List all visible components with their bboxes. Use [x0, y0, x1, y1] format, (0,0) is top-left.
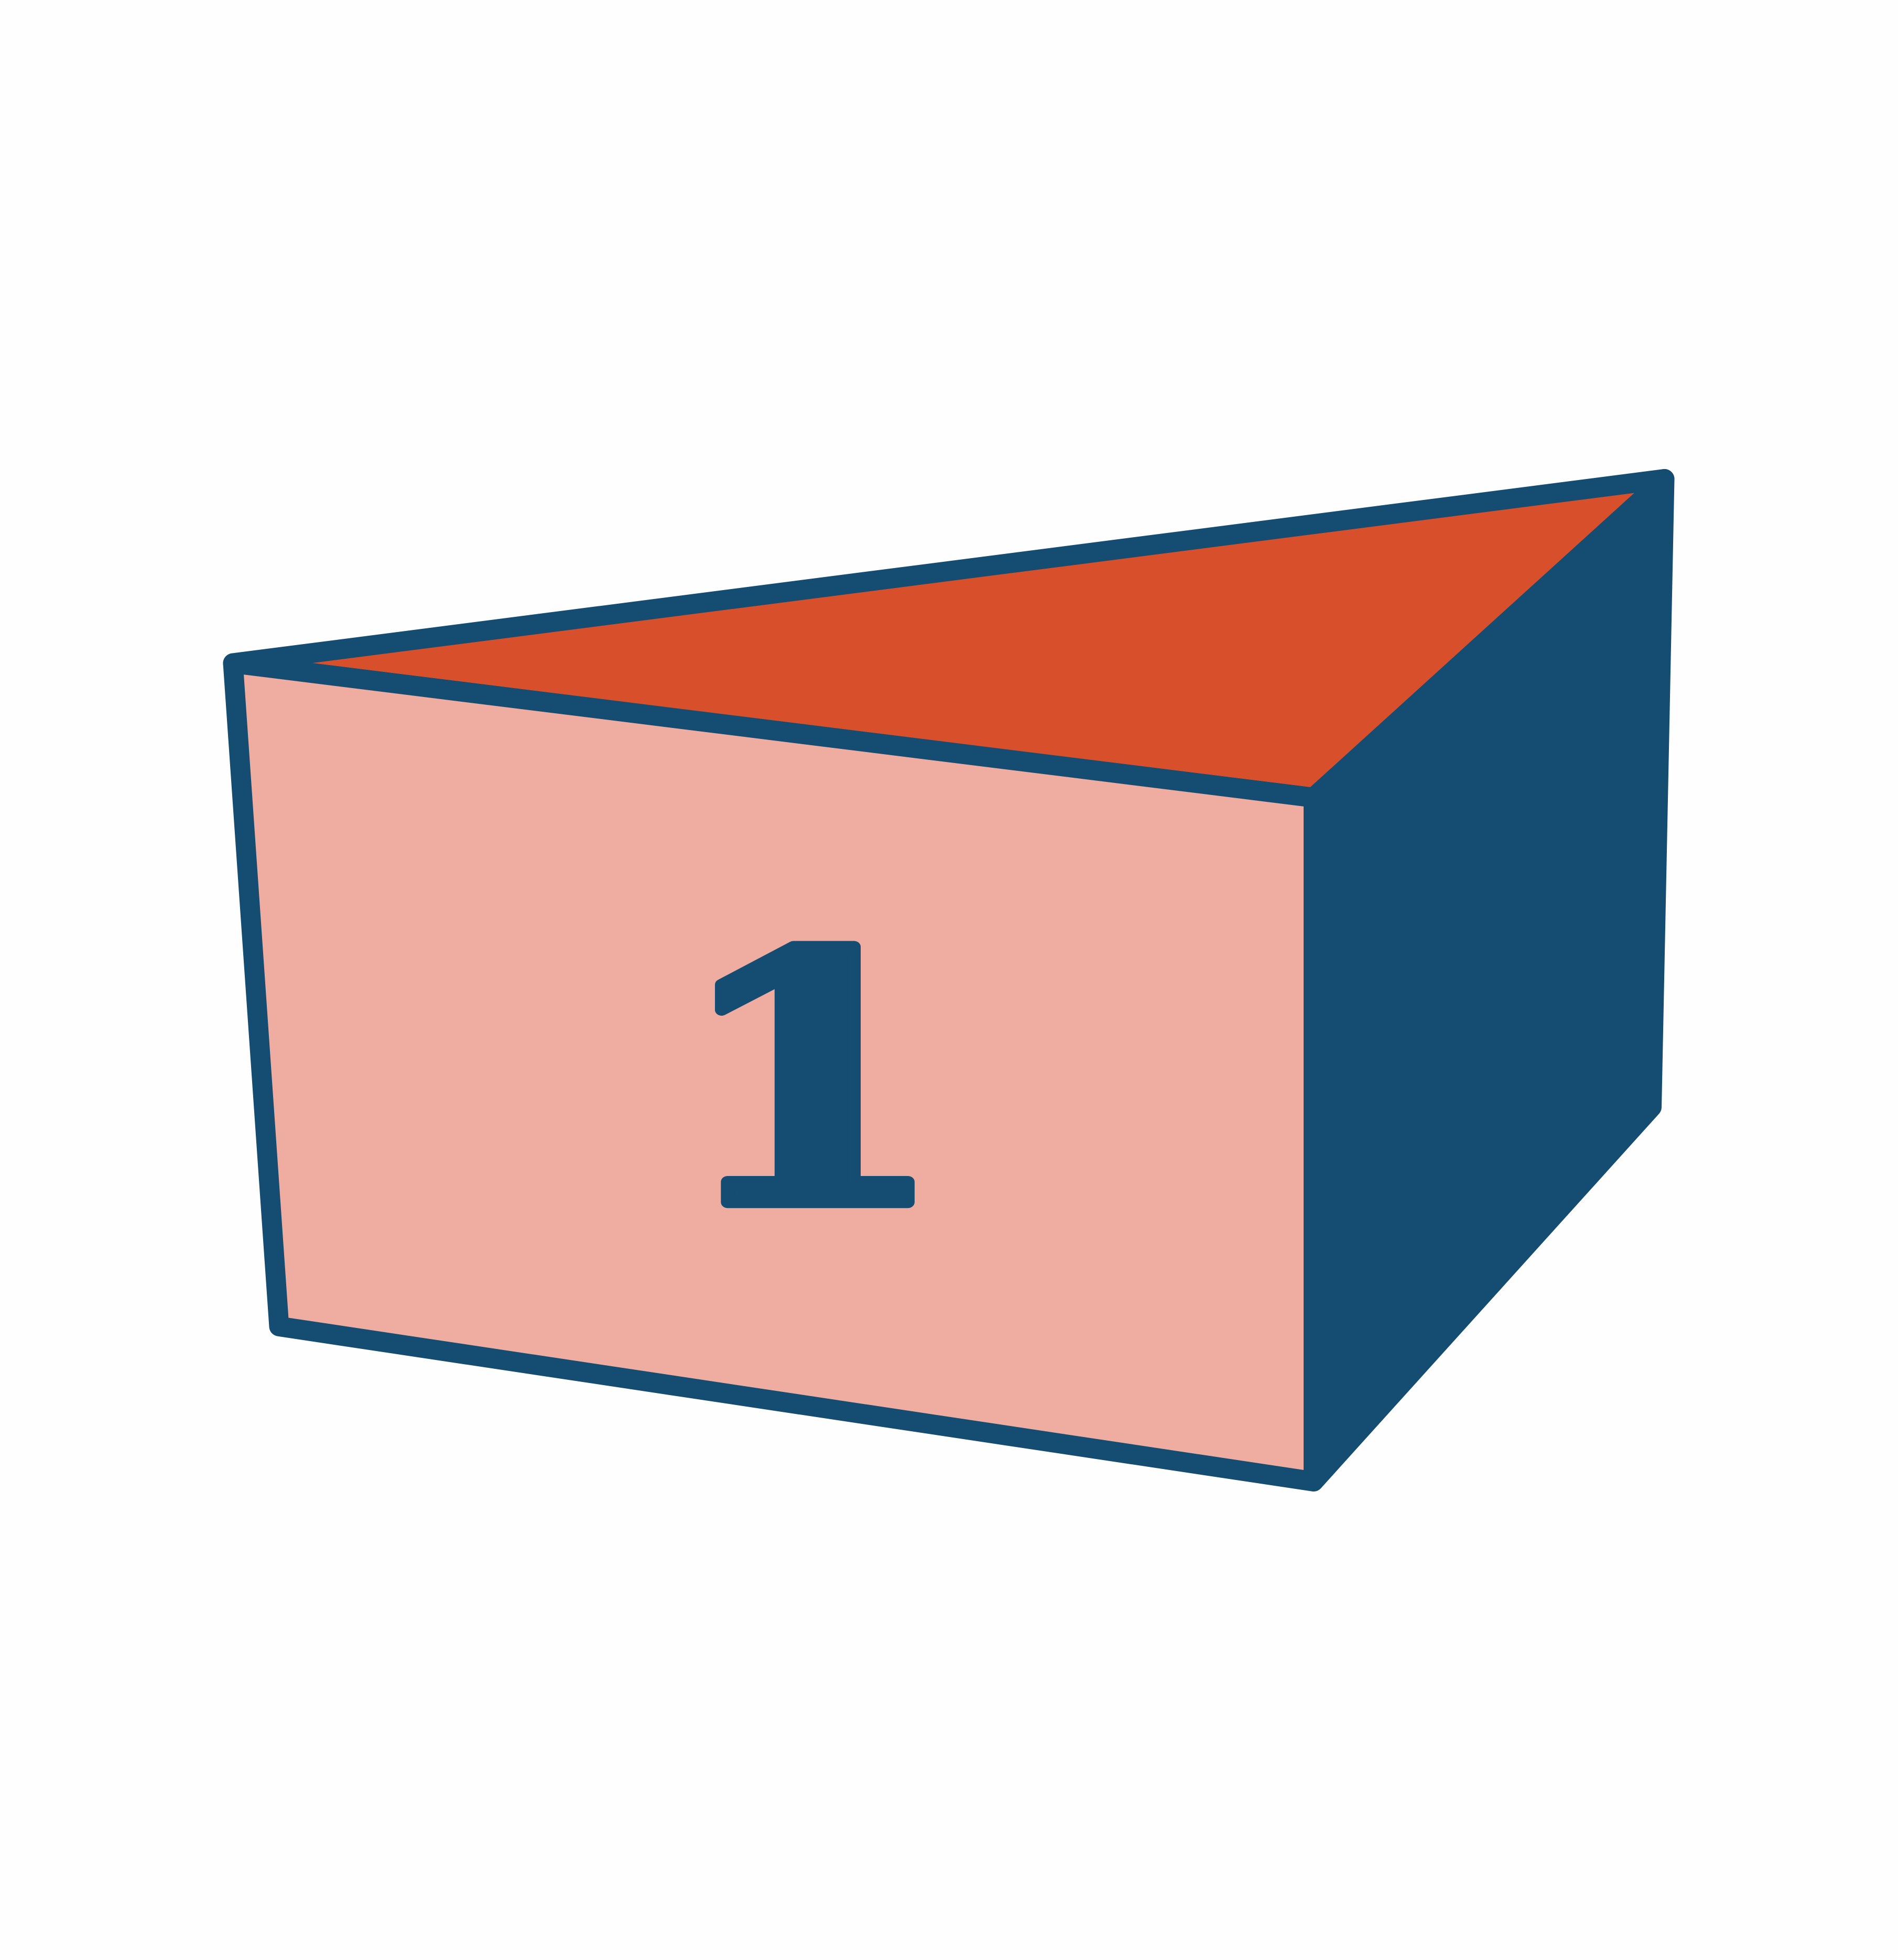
right side face: [1314, 479, 1665, 1482]
block: wedge shape: [233, 479, 1665, 1482]
number 1: 1: [674, 879, 947, 1284]
front face: [233, 663, 1314, 1482]
top face: [233, 479, 1665, 798]
